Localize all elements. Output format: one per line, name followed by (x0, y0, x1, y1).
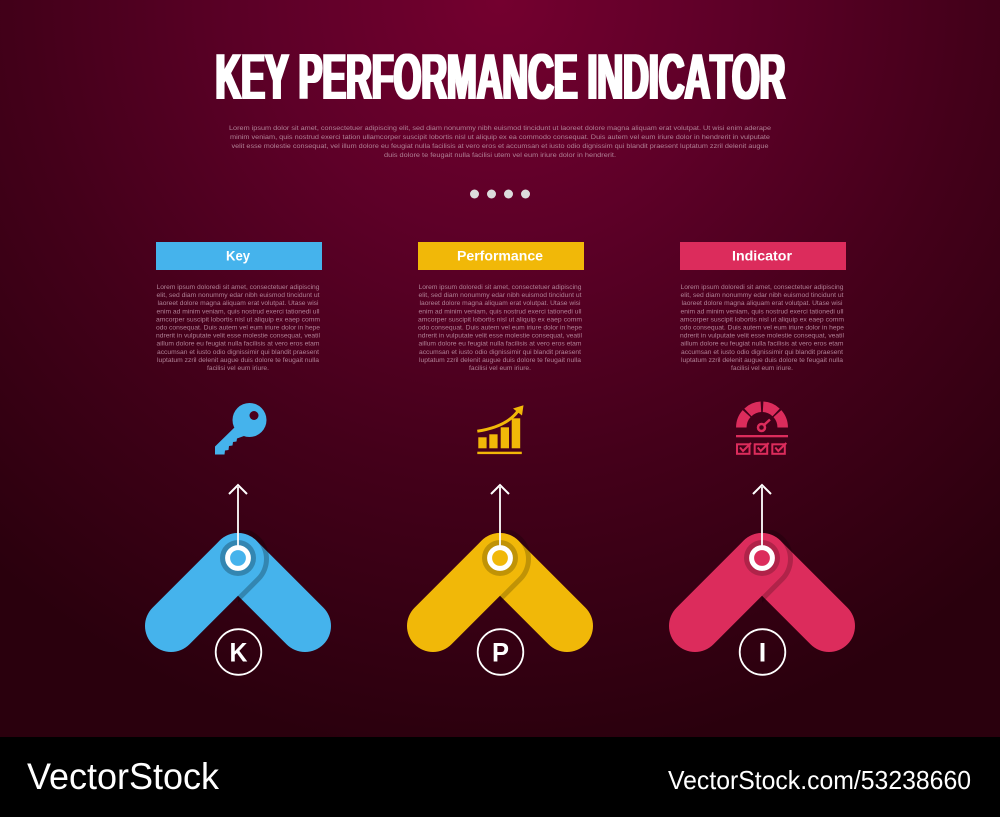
text block: Performance: enim ad minim veniam, quis nostrud exerci tationedi ull (418, 308, 582, 315)
heading: Key (156, 242, 322, 270)
text block: Indicator: laoreet dolore magna aliquam erat volutpat. Utase wisi (682, 300, 843, 307)
heading: Indicator: Indicator (732, 248, 793, 264)
text block: Performance: accumsan et iusto odio dignissimir qui blandit praesent (419, 349, 581, 356)
letter badge: P: P (492, 638, 509, 668)
intro text (229, 125, 771, 159)
text block: Key: Lorem ipsum doloredi sit amet, consectetuer adipiscing (156, 284, 320, 291)
text block: Indicator: accumsan et iusto odio dignissimir qui blandit praesent (681, 349, 843, 356)
text block: Indicator (680, 284, 844, 372)
intro text: duis dolore te feugait nulla facilisi utem vel eum iriure dolor in hendrerit. (384, 152, 616, 159)
text block: Indicator: luptatum zzril delenit augue duis dolore te feugait nulla (681, 357, 843, 364)
text block: Key: accumsan et iusto odio dignissimir qui blandit praesent (157, 349, 319, 356)
text block: Performance: elit, sed diam nonummy edar nibh euismod tincidunt ut (418, 292, 582, 299)
watermark logo: VectorStock (27, 756, 219, 797)
arrow (491, 485, 509, 546)
arrow (229, 485, 247, 546)
letter badge: K: K (230, 638, 248, 668)
text block: Performance: laoreet dolore magna aliquam erat volutpat. Utase wisi (420, 300, 581, 307)
letter badge: I (740, 629, 785, 675)
title: KEY PERFORMANCE INDICATOR (216, 42, 785, 114)
text block: Key: ndrerit in vulputate velit esse molestie consequat, veatil (156, 333, 320, 340)
letter badge: K (216, 629, 261, 675)
text block: Indicator: ndrerit in vulputate velit esse molestie consequat, veatil (680, 333, 844, 340)
column: Key (156, 242, 322, 675)
letter badge: P (478, 629, 523, 675)
text block: Key: enim ad minim veniam, quis nostrud exerci tationedi ull (156, 308, 320, 315)
chevron: Key (171, 540, 305, 626)
intro text: minim veniam, quis nostrud exerci tation ullamcorper suscipit lobortis nisl ut aliquip ex ea commodo consequat. Duis autem vel eum iriure dolor in hendrerit in vulputate (230, 134, 770, 141)
text block: Performance: odo consequat. Duis autem vel eum iriure dolor in hepe (418, 324, 582, 332)
text block: Performance: aillum dolore eu feugiat nulla facilisis at vero eros etam (418, 341, 582, 348)
text block: Performance: facilisi vel eum iriure. (469, 365, 531, 372)
heading: Indicator (680, 242, 846, 270)
letter badge: I: I (759, 638, 766, 668)
text block: Key: laoreet dolore magna aliquam erat volutpat. Utase wisi (158, 300, 319, 307)
column: Indicator (680, 242, 846, 675)
intro text: Lorem ipsum dolor sit amet, consectetuer adipiscing elit, sed diam nonummy nibh euismod tincidunt ut laoreet dolore magna aliquam erat volutpat. Ut wisi enim aderape (229, 125, 771, 132)
text block: Key: aillum dolore eu feugiat nulla facilisis at vero eros etam (156, 341, 320, 348)
text block: Indicator: aillum dolore eu feugiat nulla facilisis at vero eros etam (680, 341, 844, 348)
text block: Indicator: enim ad minim veniam, quis nostrud exerci tationedi ull (680, 308, 844, 315)
text block: Indicator: Lorem ipsum doloredi sit amet, consectetuer adipiscing (680, 284, 844, 291)
text block: Indicator: odo consequat. Duis autem vel eum iriure dolor in hepe (680, 324, 844, 332)
chevron: Performance (433, 540, 567, 626)
text block: Performance: amcorper suscipit lobortis nisl ut aliquip ex eaep comm (418, 316, 582, 323)
text block: Indicator: elit, sed diam nonummy edar nibh euismod tincidunt ut (680, 292, 844, 299)
arrow (753, 485, 771, 546)
icon: growth chart (477, 405, 524, 454)
heading: Performance: Performance (457, 248, 544, 264)
text block: Key (156, 284, 320, 372)
pagination dots (470, 190, 530, 198)
watermark url: VectorStock.com/53238660 (668, 765, 971, 795)
text block: Key: elit, sed diam nonummy edar nibh euismod tincidunt ut (156, 292, 320, 299)
footer banner (0, 737, 1000, 817)
text block: Indicator: facilisi vel eum iriure. (731, 365, 793, 372)
text block: Indicator: amcorper suscipit lobortis nisl ut aliquip ex eaep comm (680, 316, 844, 323)
text block: Key: luptatum zzril delenit augue duis dolore te feugait nulla (157, 357, 319, 364)
text block: Key: amcorper suscipit lobortis nisl ut aliquip ex eaep comm (156, 316, 320, 323)
text block: Key: odo consequat. Duis autem vel eum iriure dolor in hepe (156, 324, 320, 332)
icon: key (215, 403, 266, 454)
heading: Performance (418, 242, 584, 270)
icon: gauge with checkboxes (736, 407, 788, 454)
intro text: velit esse molestie consequat, vel illum dolore eu feugiat nulla facilisis at vero eros et accumsan et iusto odio dignissim qui blandit praesent luptatum zzril delenit augue (232, 143, 769, 150)
heading: Key: Key (226, 248, 250, 264)
text block: Performance (418, 284, 582, 372)
text block: Performance: ndrerit in vulputate velit esse molestie consequat, veatil (418, 333, 582, 340)
text block: Performance: luptatum zzril delenit augue duis dolore te feugait nulla (419, 357, 581, 364)
text block: Key: facilisi vel eum iriure. (207, 365, 269, 372)
column: Performance (418, 242, 584, 675)
text block: Performance: Lorem ipsum doloredi sit amet, consectetuer adipiscing (418, 284, 582, 291)
chevron: Indicator (695, 540, 829, 626)
